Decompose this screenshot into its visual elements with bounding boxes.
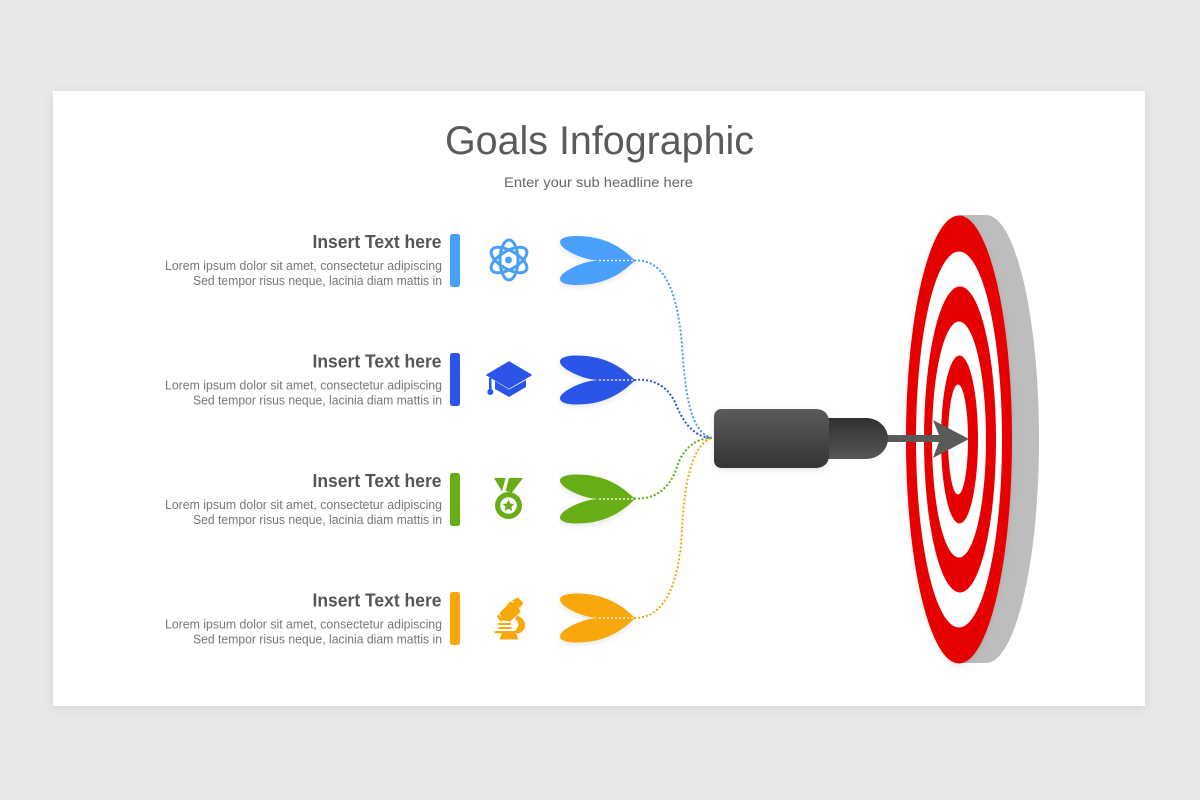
item 4 body text: Sed tempor risus neque, lacinia diam mattis in <box>193 632 442 646</box>
item 3 colour bar <box>450 473 460 526</box>
icon: microscope <box>494 598 525 640</box>
connector: green dotted line <box>635 438 712 499</box>
item 4 body text: Lorem ipsum dolor sit amet, consectetur adipiscing <box>165 618 442 632</box>
item 2 colour bar <box>450 353 460 406</box>
connector: dark blue dotted line <box>635 380 712 438</box>
item 1 body text: Lorem ipsum dolor sit amet, consectetur adipiscing <box>165 259 442 273</box>
item 2 heading: Insert Text here <box>312 352 442 372</box>
connector: light blue dotted line <box>635 260 712 438</box>
icon: atom <box>487 240 531 280</box>
item 1: light blue <box>165 232 635 288</box>
icon: medal <box>494 478 523 519</box>
target rings <box>906 216 1012 664</box>
item 1 heading: Insert Text here <box>312 232 442 252</box>
connector: orange dotted line <box>635 438 712 618</box>
icon: graduation cap <box>487 362 531 397</box>
item 4 heading: Insert Text here <box>312 590 442 610</box>
dart barrel <box>826 418 888 459</box>
item 4 colour bar <box>450 592 460 645</box>
item 3 body text: Lorem ipsum dolor sit amet, consectetur adipiscing <box>165 498 442 512</box>
item 4: orange <box>165 590 635 646</box>
item 3 heading: Insert Text here <box>312 471 442 491</box>
target side depth <box>959 215 1039 663</box>
item 3: green <box>165 471 635 527</box>
title: Goals Infographic <box>445 119 754 163</box>
item 1 body text: Sed tempor risus neque, lacinia diam mattis in <box>193 274 442 288</box>
item 1 colour bar <box>450 234 460 287</box>
arrow fletching: green <box>560 474 635 524</box>
item 2 body text: Lorem ipsum dolor sit amet, consectetur adipiscing <box>165 378 442 392</box>
dart body <box>714 409 829 468</box>
item 2: dark blue <box>165 352 635 408</box>
item 3 body text: Sed tempor risus neque, lacinia diam mattis in <box>193 513 442 527</box>
subtitle: Enter your sub headline here <box>504 174 693 190</box>
dart <box>714 409 969 468</box>
item 2 body text: Sed tempor risus neque, lacinia diam mattis in <box>193 394 442 408</box>
arrow fletching: orange <box>560 594 635 642</box>
panel: white card <box>53 91 1145 706</box>
dart arrow shaft and head <box>885 420 969 458</box>
arrow fletching: dark blue <box>560 356 635 404</box>
arrow fletching: light blue <box>560 236 635 285</box>
target board <box>906 215 1039 664</box>
